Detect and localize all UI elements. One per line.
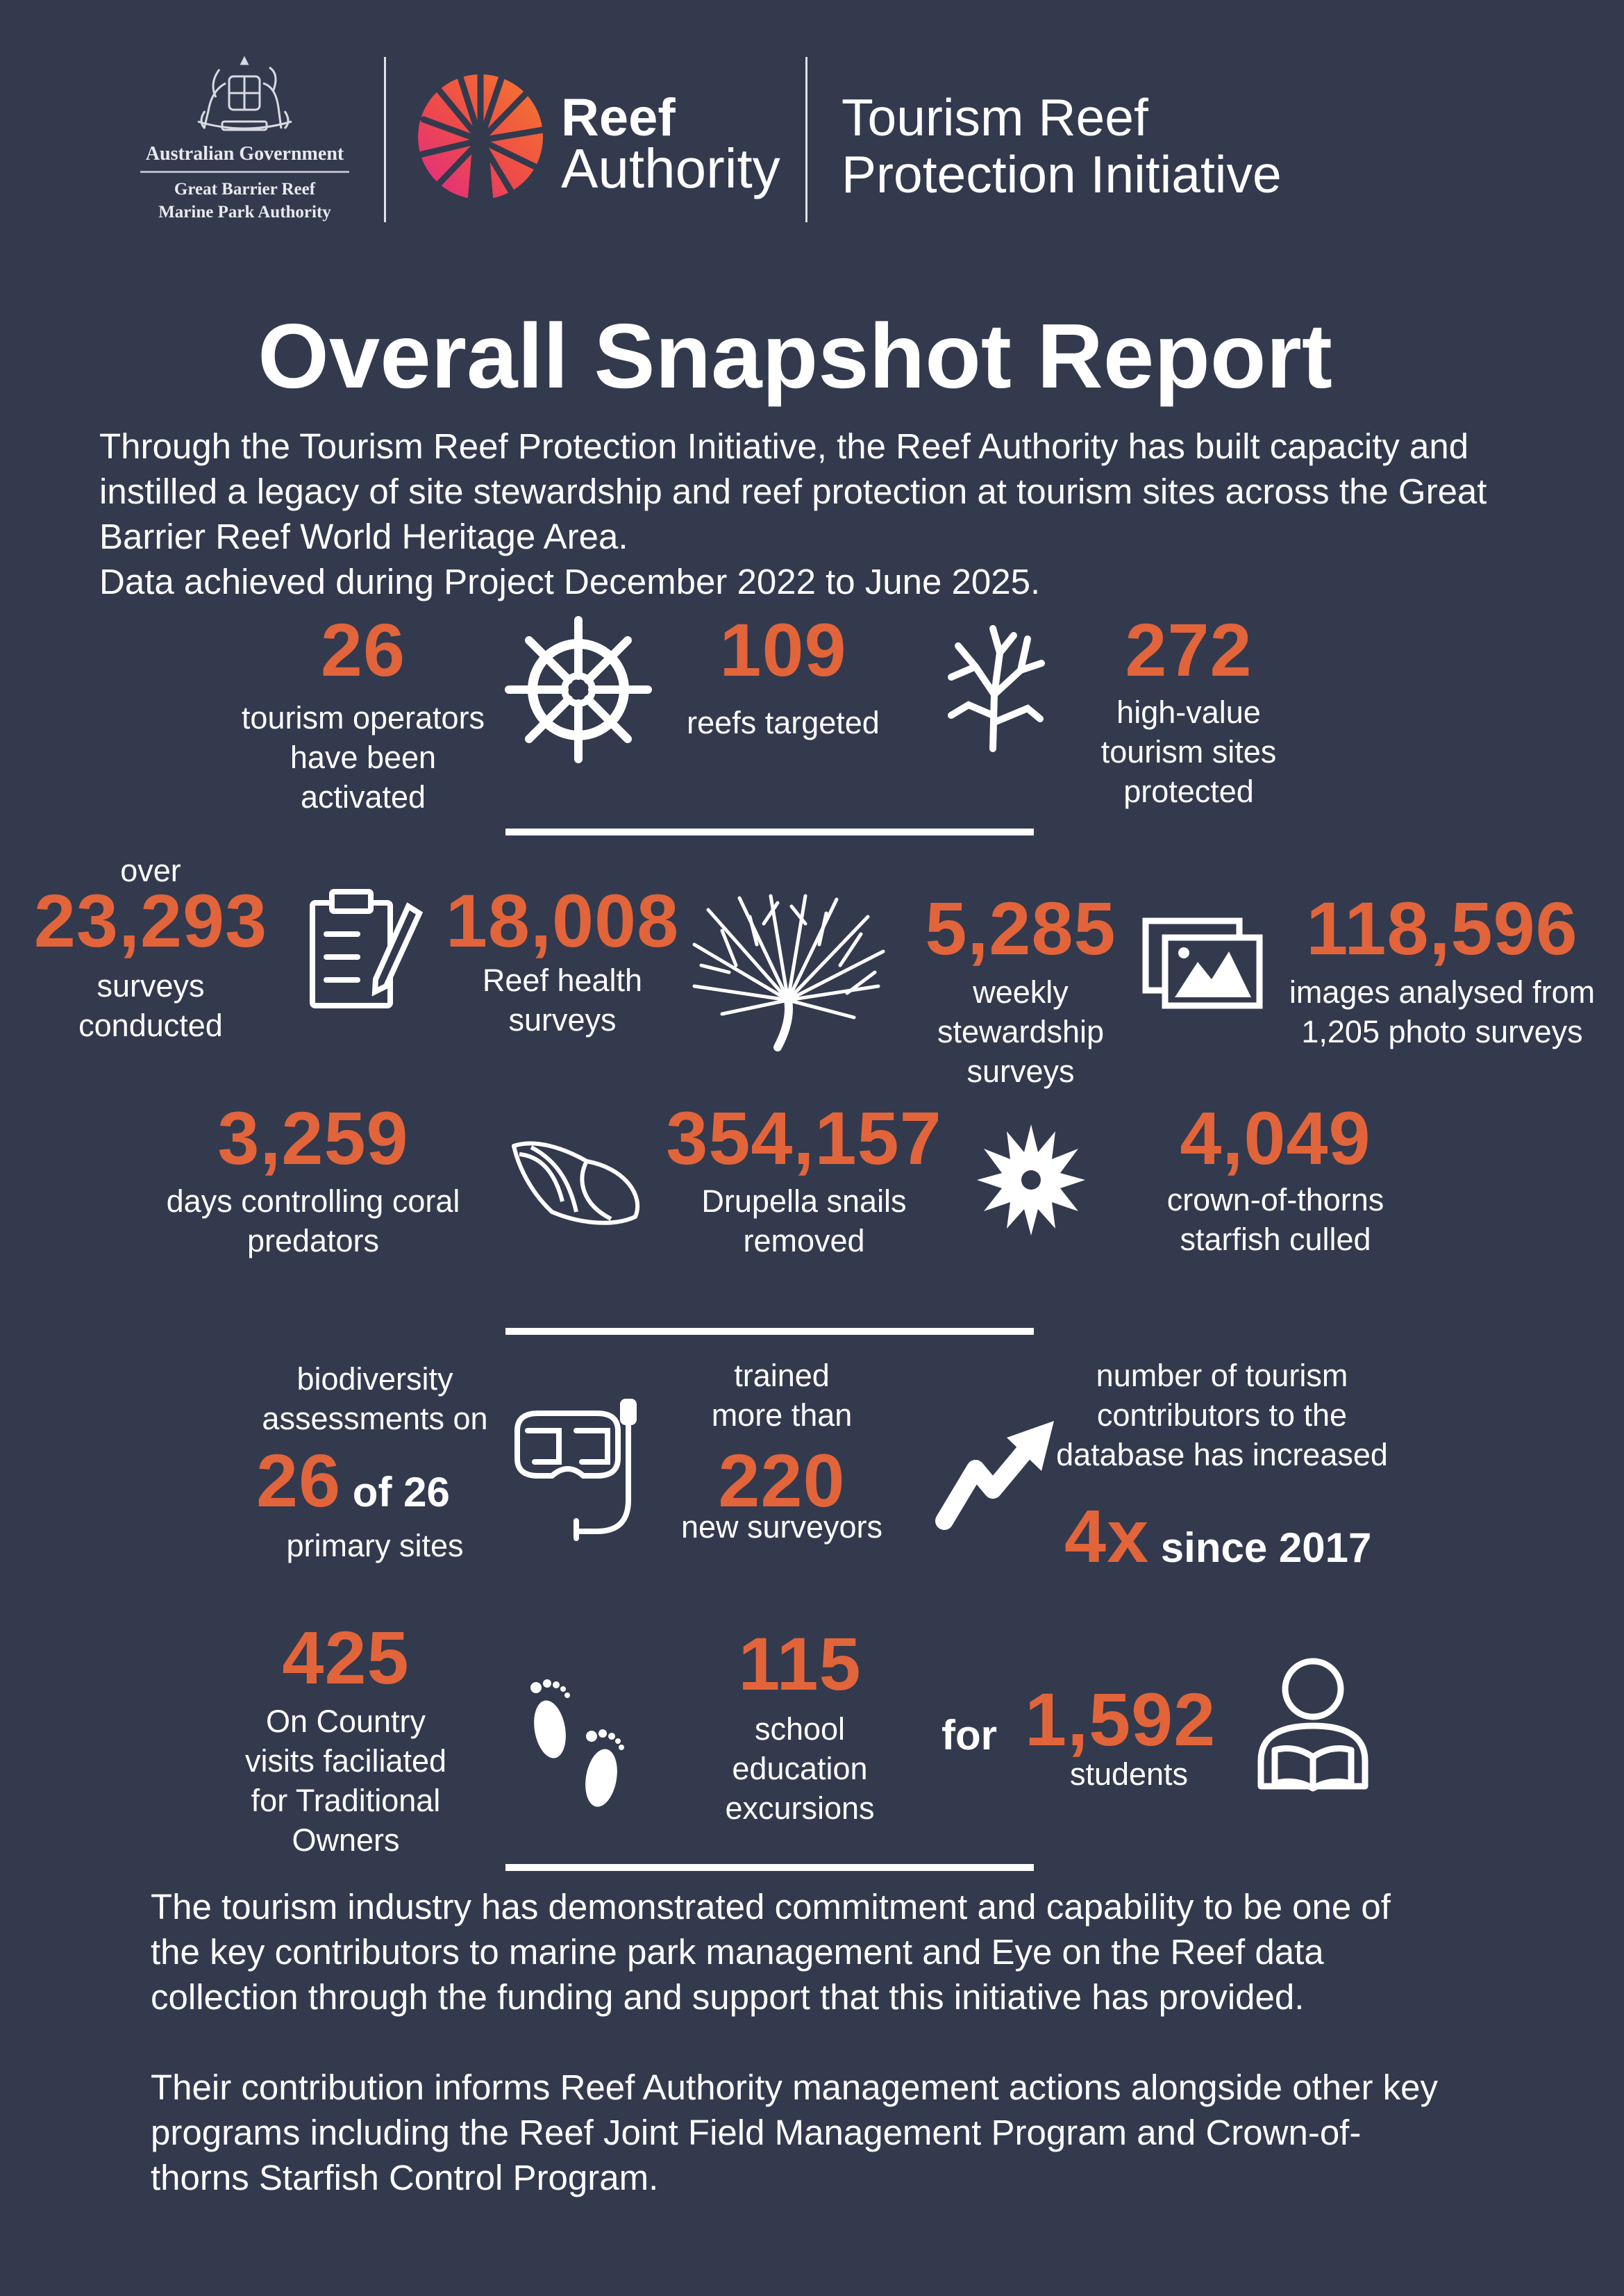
stat: 5,285 weekly: surveys (966, 1054, 1075, 1089)
text: Australian Government: Australian Government (146, 143, 344, 165)
icon: reef logo circle (418, 74, 543, 199)
stat: 115 excursions: school (755, 1711, 845, 1747)
stat: 272 sites: 272 (1125, 608, 1253, 692)
stat: 115 excursions: education (732, 1751, 868, 1786)
icon: snorkel mask (517, 1401, 634, 1538)
stat: 4x contributors: number of tourism (1096, 1358, 1348, 1393)
stat: 354,157 drupella (666, 1096, 942, 1258)
stat: 18,008 reef health (446, 879, 679, 1038)
stat: 272 sites: protected (1123, 774, 1254, 809)
stat: 26 tourism operators: activated (301, 779, 426, 815)
header: Reef Authority logo (418, 74, 780, 199)
stat: 425 on country: 425 (282, 1615, 410, 1699)
stat: 425 on country: for Traditional (251, 1783, 440, 1818)
stat: 4,049 crown-of-thorns: starfish culled (1180, 1222, 1371, 1257)
stat: 109 reefs: 109 (719, 608, 847, 692)
stat: 109 reefs (687, 608, 880, 740)
stat: biodiversity 26 of 26 (256, 1361, 488, 1563)
closing paragraph: the key contributors to marine park management and Eye on the Reef data (151, 1932, 1324, 1972)
header: Tourism Reef Protection Initiative: Tourism Reef (842, 88, 1148, 147)
stat: 220 surveyors (681, 1358, 882, 1545)
stat: 4,049 crown-of-thorns: crown-of-thorns (1167, 1182, 1384, 1217)
header: Tourism Reef Protection Initiative (842, 88, 1282, 203)
stat: 5,285 weekly (925, 886, 1116, 1089)
closing paragraph: The tourism industry has demonstrated commitment and capability to be one of (151, 1887, 1391, 1927)
stat: 118,596 images (1289, 886, 1595, 1049)
stat: for 1,592 students (941, 1677, 1216, 1792)
stat: biodiversity 26 of 26: primary sites (286, 1528, 464, 1563)
closing paragraph: Their contribution informs Reef Authority management actions alongside other key (151, 2068, 1438, 2107)
stat: 354,157 drupella: Drupella snails (701, 1183, 907, 1219)
stat: 425 on country: Owners (292, 1822, 400, 1858)
icon: clipboard and pencil (312, 892, 419, 1006)
stat: biodiversity 26 of 26: 26 of 26 (256, 1438, 450, 1522)
stat: 115 excursions: 115 (738, 1622, 862, 1706)
icon: photos (1146, 921, 1259, 1006)
stat: 115 excursions: excursions (725, 1790, 875, 1826)
stat: 354,157 drupella: removed (743, 1223, 865, 1258)
stat: for 1,592 students: students (1070, 1756, 1188, 1792)
stat: 115 excursions (725, 1622, 875, 1826)
icon: small coral (951, 629, 1041, 749)
header: Tourism Reef Protection Initiative: Protection Initiative (842, 145, 1282, 203)
text: Great Barrier Reef Marine Park Authority (158, 180, 331, 222)
stat: biodiversity 26 of 26: assessments on (262, 1401, 488, 1436)
intro paragraph: Barrier Reef World Heritage Area. (99, 517, 628, 556)
title: Overall Snapshot Report (258, 305, 1332, 407)
stat: 4x contributors: 4x since 2017 (1064, 1494, 1371, 1578)
stat: 26 tourism operators: tourism operators (242, 700, 485, 735)
header: Australian Government logo (140, 56, 349, 222)
stat: 23,293 surveys (34, 853, 267, 1043)
header: Reef Authority logo: Authority (561, 138, 780, 199)
stat: 425 on country (245, 1615, 446, 1858)
icon: sea fan coral (694, 896, 883, 1047)
stat: 220 surveyors: trained (734, 1358, 830, 1393)
stat: 272 sites (1101, 608, 1276, 809)
stat: 109 reefs: reefs targeted (687, 705, 880, 740)
text: Great Barrier Reef Marine Park Authority: Great Barrier Reef (174, 180, 315, 199)
stat: 4x contributors (1056, 1358, 1388, 1578)
stat: 5,285 weekly: stewardship (937, 1014, 1104, 1049)
stat: 3,259 days (167, 1096, 460, 1258)
intro paragraph (99, 426, 1487, 601)
stat: 220 surveyors: 220 (718, 1438, 846, 1522)
stat: 272 sites: high-value (1116, 694, 1261, 730)
stat: 118,596 images: 118,596 (1306, 886, 1578, 970)
icon: coat of arms (197, 56, 292, 131)
text: Reef Authority: Reef (561, 88, 676, 147)
stat: 3,259 days: 3,259 (217, 1096, 409, 1180)
stat: 26 tourism operators: 26 (321, 608, 405, 692)
closing paragraph: collection through the funding and support that this initiative has provided. (151, 1977, 1304, 2017)
icon: ship helm (509, 620, 648, 759)
stat: 354,157 drupella: 354,157 (666, 1096, 942, 1180)
stat: 118,596 images: images analysed from (1289, 974, 1595, 1010)
text: Great Barrier Reef Marine Park Authority: Marine Park Authority (158, 203, 331, 222)
stat: 220 surveyors: new surveyors (681, 1509, 882, 1545)
stat: 4x contributors: database has increased (1056, 1437, 1388, 1472)
stat: 272 sites: tourism sites (1101, 734, 1276, 770)
stat: for 1,592 students: 1,592 (1025, 1677, 1216, 1761)
stat: 3,259 days: days controlling coral (167, 1183, 460, 1219)
stat: 23,293 surveys: surveys (97, 968, 205, 1004)
closing paragraph (151, 1887, 1438, 2197)
closing paragraph: programs including the Reef Joint Field Management Program and Crown-of- (151, 2113, 1361, 2152)
icon: student reading (1261, 1661, 1365, 1788)
stat: 3,259 days: predators (247, 1223, 379, 1258)
stat: biodiversity 26 of 26: biodiversity (296, 1361, 453, 1397)
stat: for 1,592 students: for (941, 1712, 997, 1758)
stat: 26 tourism operators (242, 608, 485, 815)
icon: rising arrow (944, 1421, 1054, 1521)
stat: 425 on country: visits faciliated (245, 1743, 446, 1779)
icon: footprints (530, 1679, 624, 1809)
stat: 18,008 reef health: surveys (508, 1002, 617, 1038)
stat: 118,596 images: 1,205 photo surveys (1301, 1014, 1583, 1049)
closing paragraph: thorns Starfish Control Program. (151, 2158, 658, 2197)
stat: 5,285 weekly: 5,285 (925, 886, 1116, 970)
stat: 18,008 reef health: Reef health (483, 963, 642, 998)
stat: 4,049 crown-of-thorns (1167, 1096, 1384, 1257)
stat: 18,008 reef health: 18,008 (446, 879, 679, 963)
intro paragraph: Data achieved during Project December 2022 to June 2025. (99, 562, 1040, 601)
intro paragraph: instilled a legacy of site stewardship and reef protection at tourism sites across the Great (99, 472, 1487, 511)
stat: 26 tourism operators: have been (290, 740, 436, 775)
icon: shell (514, 1143, 637, 1223)
icon: crown-of-thorns starfish (977, 1124, 1085, 1236)
stat: 220 surveyors: more than (712, 1397, 852, 1433)
intro paragraph: Through the Tourism Reef Protection Initiative, the Reef Authority has built capacity and (99, 426, 1468, 466)
stat: 4x contributors: contributors to the (1097, 1397, 1347, 1433)
stat: 425 on country: On Country (266, 1704, 426, 1739)
stat: 23,293 surveys: 23,293 (34, 879, 267, 963)
stat: 23,293 surveys: conducted (78, 1008, 223, 1043)
stat: 5,285 weekly: weekly (973, 974, 1069, 1010)
stat: 4,049 crown-of-thorns: 4,049 (1180, 1096, 1371, 1180)
stat: 23,293 surveys: over (120, 853, 181, 888)
